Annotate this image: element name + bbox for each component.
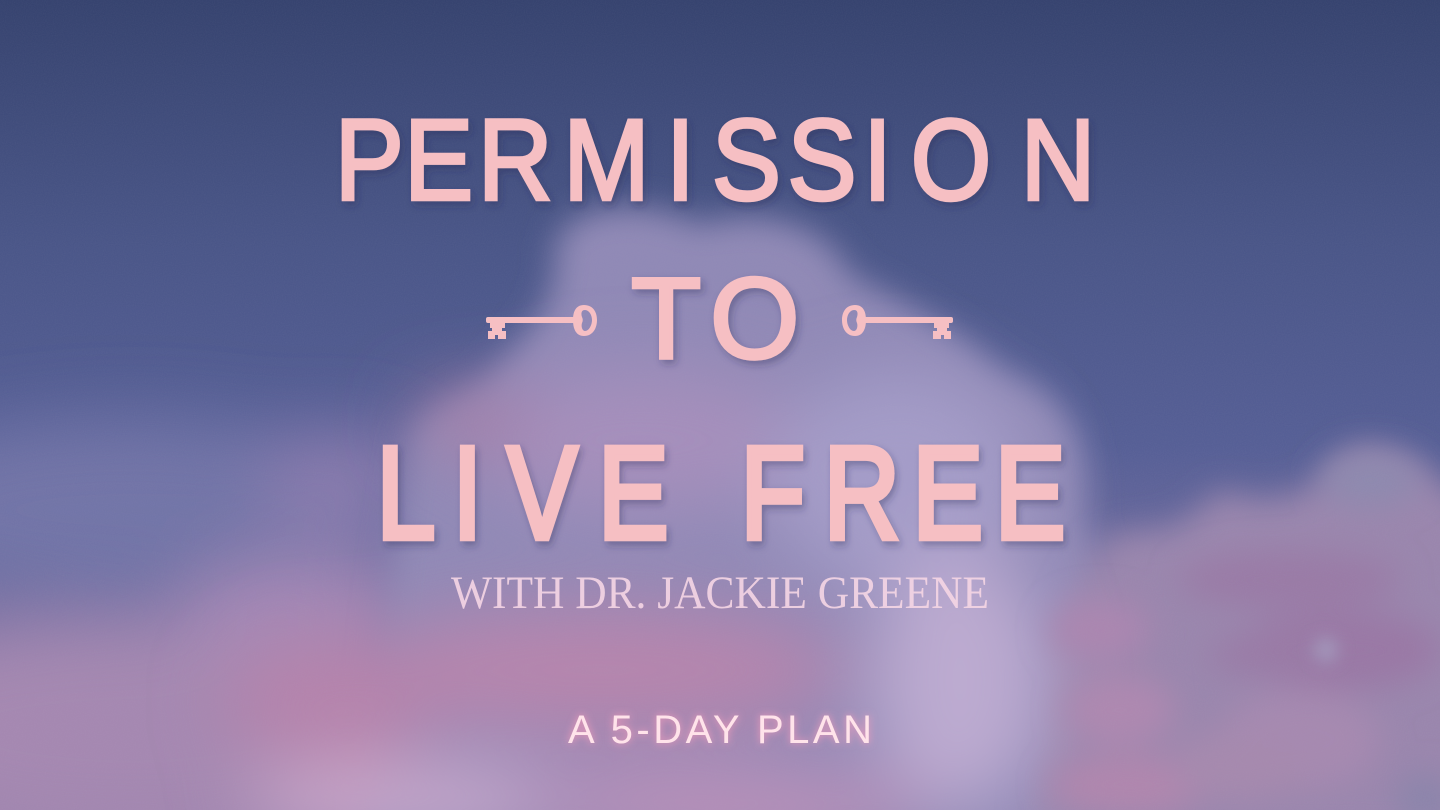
subtitle: with Dr. Jackie Greene: WITH DR. JACKIE GREENE — [451, 567, 989, 619]
title: LIVE FREE: LIVE FREE — [377, 421, 1065, 567]
cloud: main lilac column — [370, 208, 1114, 810]
title: TO: TO — [631, 255, 799, 383]
cloud: right bank pink blotches — [1050, 455, 1440, 810]
icon: right key — [842, 305, 953, 339]
icon: left key — [486, 305, 597, 339]
title: PERMISSION: PERMISSION — [335, 96, 1095, 225]
cloud: pink right bank — [1030, 447, 1440, 810]
cloud: small bright wisp — [1314, 638, 1338, 662]
cloud: pale haze and pink bottom left bank — [0, 420, 430, 810]
label: a 5-day plan: A 5-DAY PLAN — [568, 708, 872, 752]
cloud: highlights — [225, 370, 1050, 810]
